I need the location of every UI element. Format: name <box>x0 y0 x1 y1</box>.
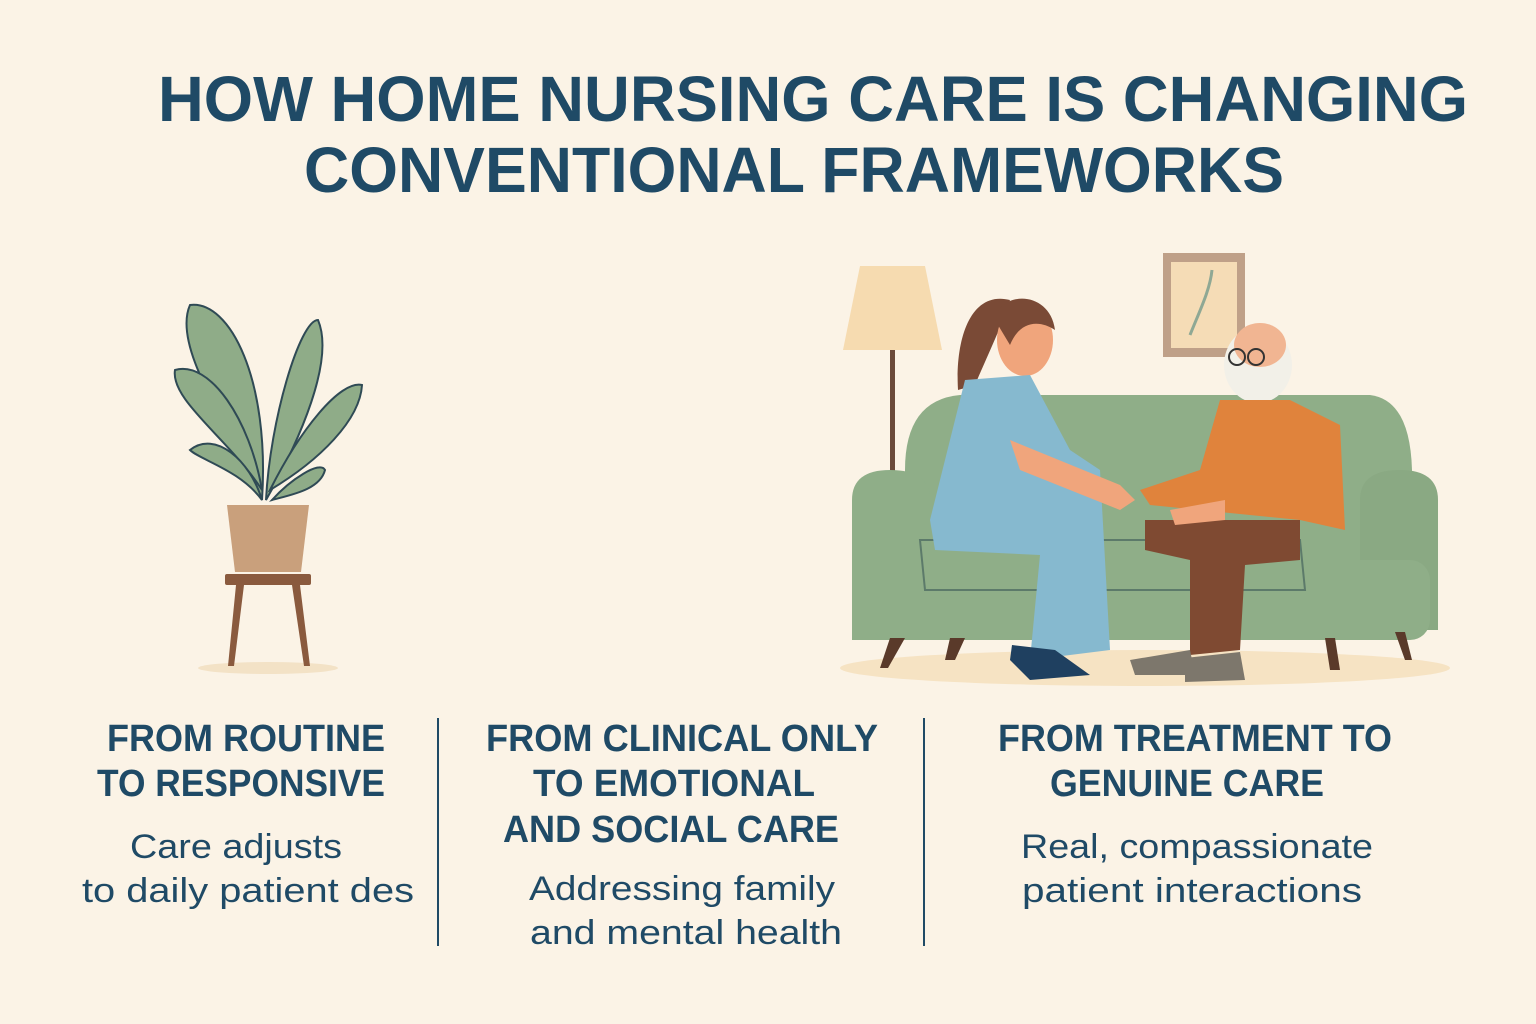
lamp <box>890 345 895 475</box>
column 3 <box>998 718 1392 910</box>
column 2: Addressing family <box>529 870 835 908</box>
column 1: Care adjusts <box>130 828 342 866</box>
nurse <box>958 299 1010 390</box>
title <box>158 63 1468 206</box>
column 3: patient interactions <box>1022 872 1362 910</box>
column 3: FROM TREATMENT TO <box>998 718 1392 760</box>
column 3: Real, compassionate <box>1021 828 1373 866</box>
illustration: nurse and patient on sofa <box>840 253 1450 686</box>
illustration: plant on stool <box>175 305 362 674</box>
title: HOW HOME NURSING CARE IS CHANGING <box>158 63 1468 135</box>
column 2: TO EMOTIONAL <box>533 763 815 805</box>
picture frame <box>1163 253 1245 357</box>
divider 1 <box>437 718 439 946</box>
column 2 <box>486 718 878 952</box>
column 3: GENUINE CARE <box>1050 763 1324 805</box>
column 1: TO RESPONSIVE <box>97 763 385 805</box>
column 2: and mental health <box>530 914 842 952</box>
column 2: FROM CLINICAL ONLY <box>486 718 878 760</box>
sofa <box>905 395 1412 600</box>
column 1 <box>82 718 414 910</box>
column 1: to daily patient des <box>82 872 414 910</box>
column 1: FROM ROUTINE <box>107 718 385 760</box>
patient <box>1224 327 1292 403</box>
column 2: AND SOCIAL CARE <box>503 809 839 851</box>
divider 2 <box>923 718 925 946</box>
title: CONVENTIONAL FRAMEWORKS <box>304 134 1284 206</box>
